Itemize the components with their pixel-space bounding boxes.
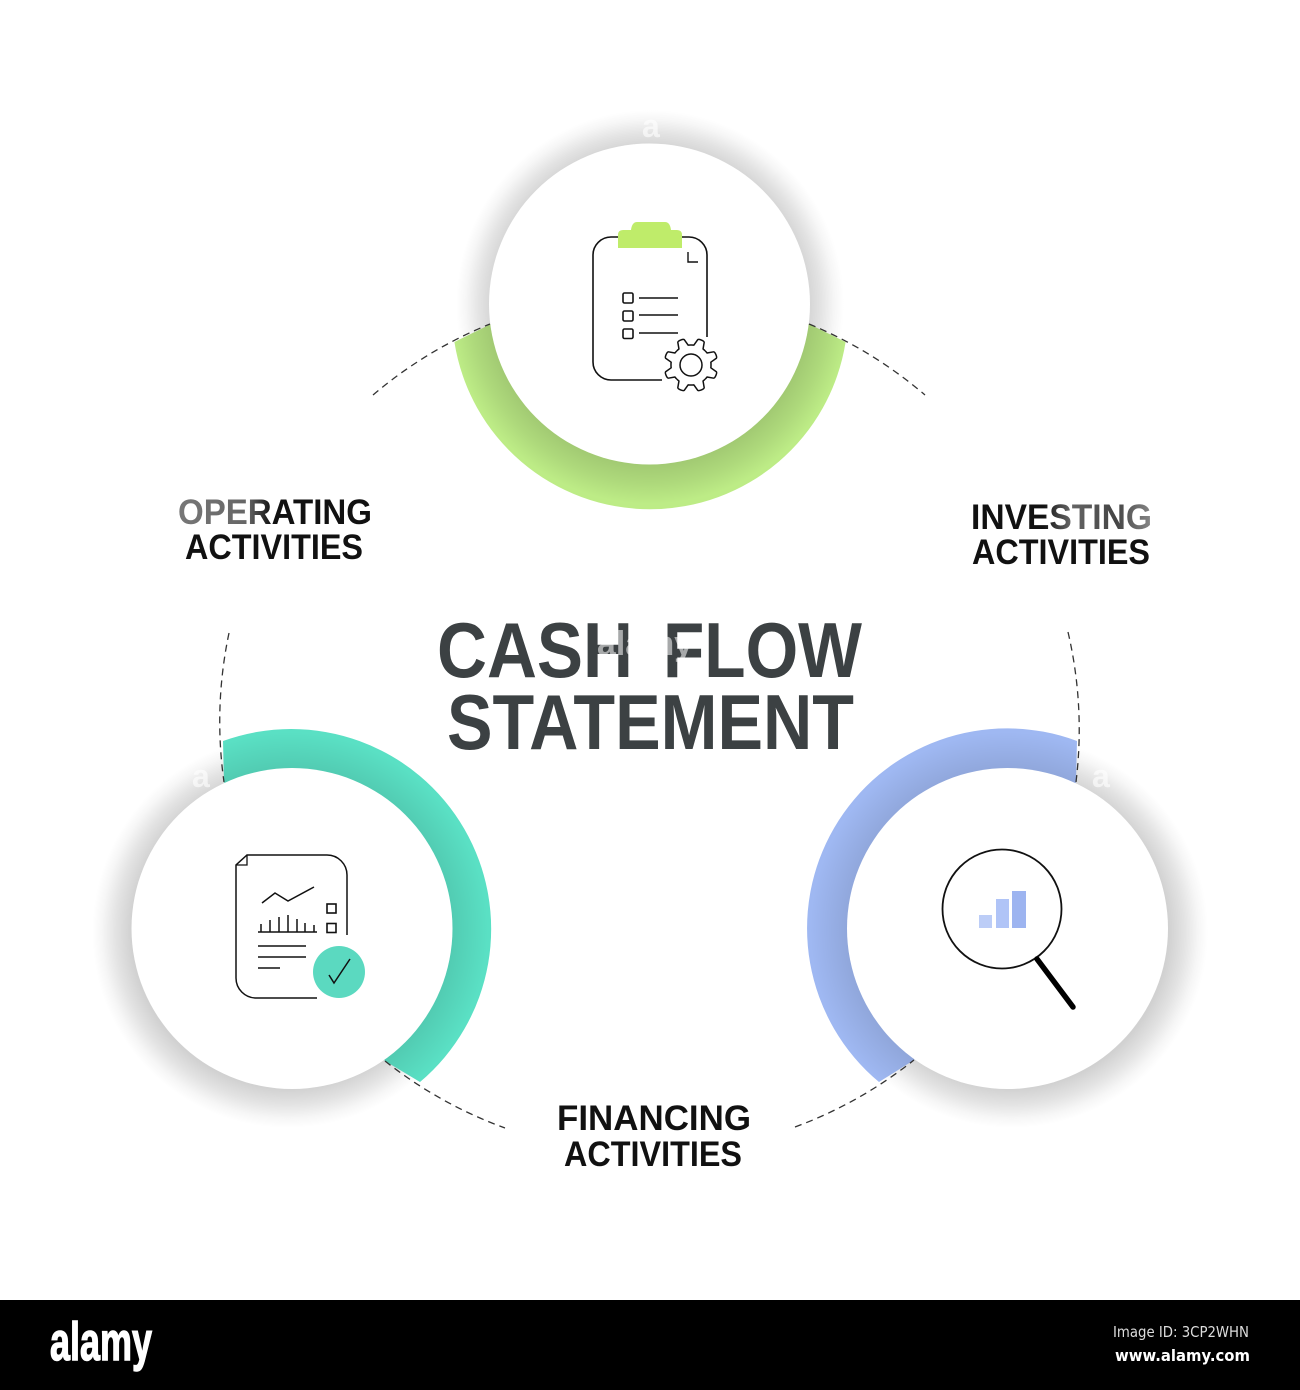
heading: investing activities: INVESTING xyxy=(971,498,1152,537)
panel: left circle (report document) xyxy=(92,729,491,1128)
blue ring xyxy=(807,728,1077,1082)
watermark glyph: a xyxy=(642,108,660,144)
green ring xyxy=(454,324,846,509)
icon: report with check badge xyxy=(236,855,365,998)
heading: investing activities: ACTIVITIES xyxy=(972,533,1150,572)
title: FLOW xyxy=(663,606,862,694)
watermark glyph: a xyxy=(1092,758,1110,794)
icon: magnifying glass with bars xyxy=(942,850,1073,1007)
heading: financing activities: ACTIVITIES xyxy=(564,1135,742,1174)
title: alamy xyxy=(597,625,693,663)
title: STATEMENT xyxy=(447,678,854,766)
watermark glyph: a xyxy=(192,758,210,794)
heading: operating activities xyxy=(178,493,372,567)
dashed connector arcs xyxy=(220,324,1079,1128)
panel: top circle (operating checklist) xyxy=(450,104,850,509)
logo: alamy: alamy xyxy=(50,1312,152,1372)
heading: investing activities xyxy=(971,498,1152,572)
website: www.alamy.com xyxy=(1115,1346,1250,1365)
teal ring xyxy=(223,729,491,1082)
icon: clipboard with gear xyxy=(593,222,719,393)
heading: operating activities: OPERATING xyxy=(178,493,372,532)
heading: financing activities: FINANCING xyxy=(557,1099,751,1138)
panel: right circle (magnifier) xyxy=(807,728,1208,1128)
footer bar xyxy=(0,1300,1300,1390)
title xyxy=(437,606,862,766)
title: CASH xyxy=(437,606,633,694)
heading: operating activities: ACTIVITIES xyxy=(185,528,363,567)
heading: financing activities xyxy=(557,1099,751,1174)
image id: Image ID: 3CP2WHN xyxy=(1113,1323,1249,1341)
